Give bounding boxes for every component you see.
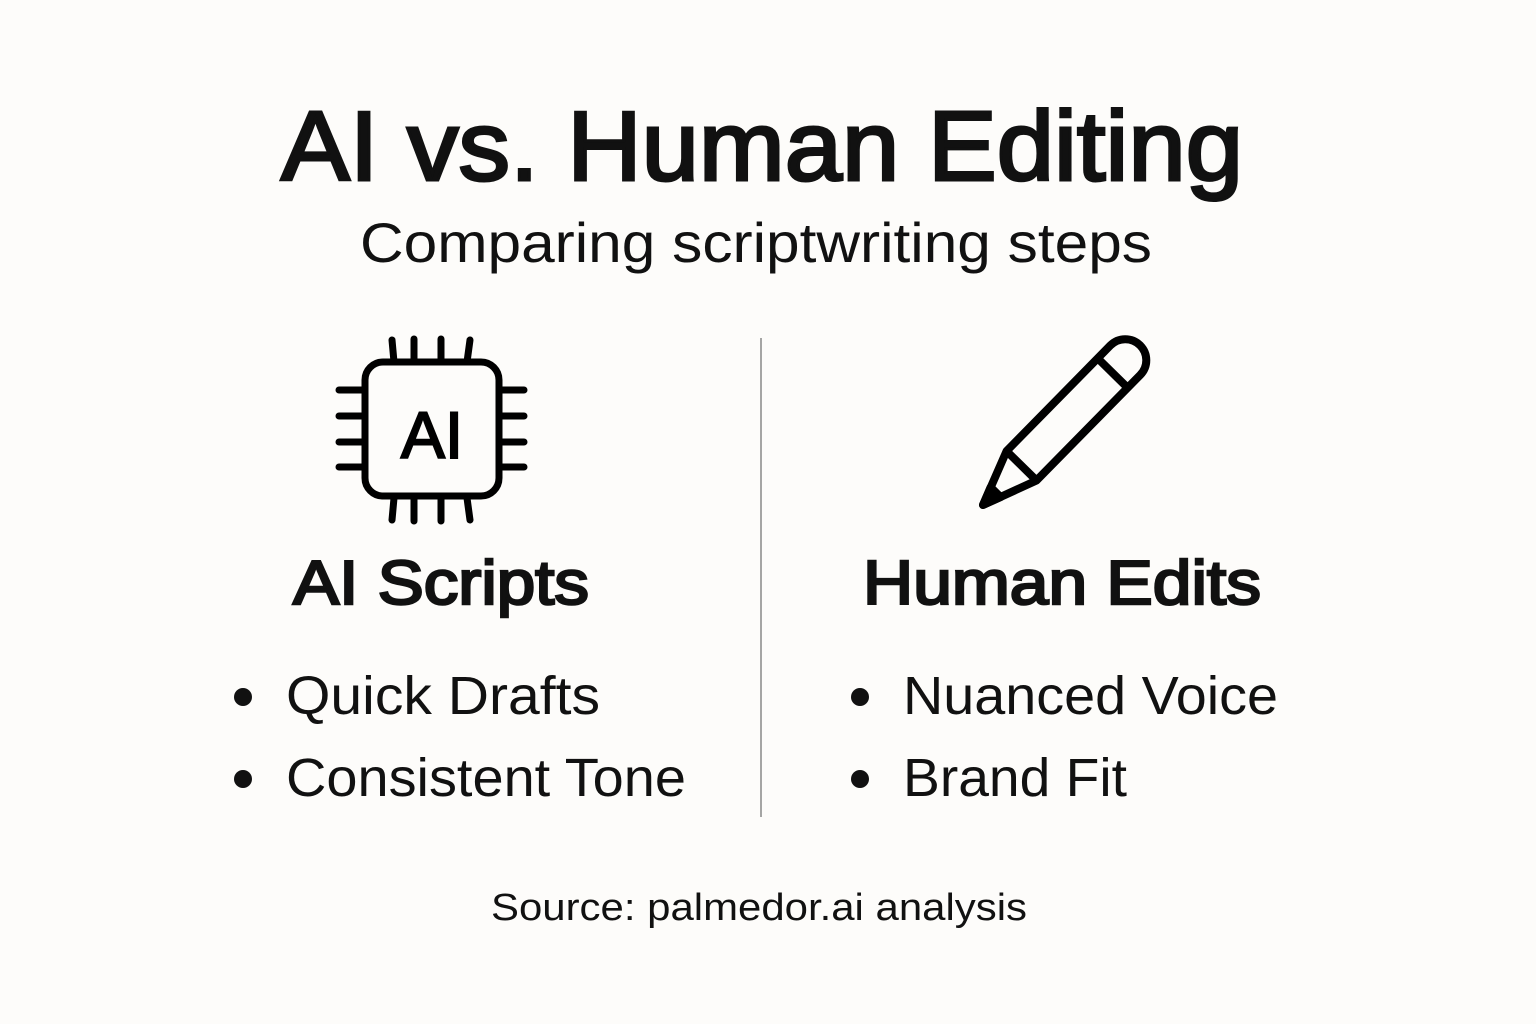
icon: pencil <box>968 331 1155 520</box>
list: AI benefits: Quick Drafts <box>286 666 600 726</box>
heading: Human Edits: Human Edits <box>863 549 1261 618</box>
list: AI benefits: Consistent Tone <box>286 748 686 808</box>
title: AI vs. Human Editing <box>281 91 1243 201</box>
list: Human benefits: Brand Fit <box>903 748 1127 808</box>
icon: AI chip <box>339 339 524 521</box>
list: AI benefits <box>234 666 686 808</box>
subtitle: Comparing scriptwriting steps <box>360 211 1152 274</box>
heading: AI Scripts: AI Scripts <box>293 549 589 618</box>
source note: Source: palmedor.ai analysis <box>491 887 1027 929</box>
list: Human benefits: Nuanced Voice <box>903 666 1278 726</box>
divider <box>760 338 762 817</box>
icon: AI chip: AI <box>401 398 463 472</box>
list: Human benefits <box>851 666 1278 808</box>
